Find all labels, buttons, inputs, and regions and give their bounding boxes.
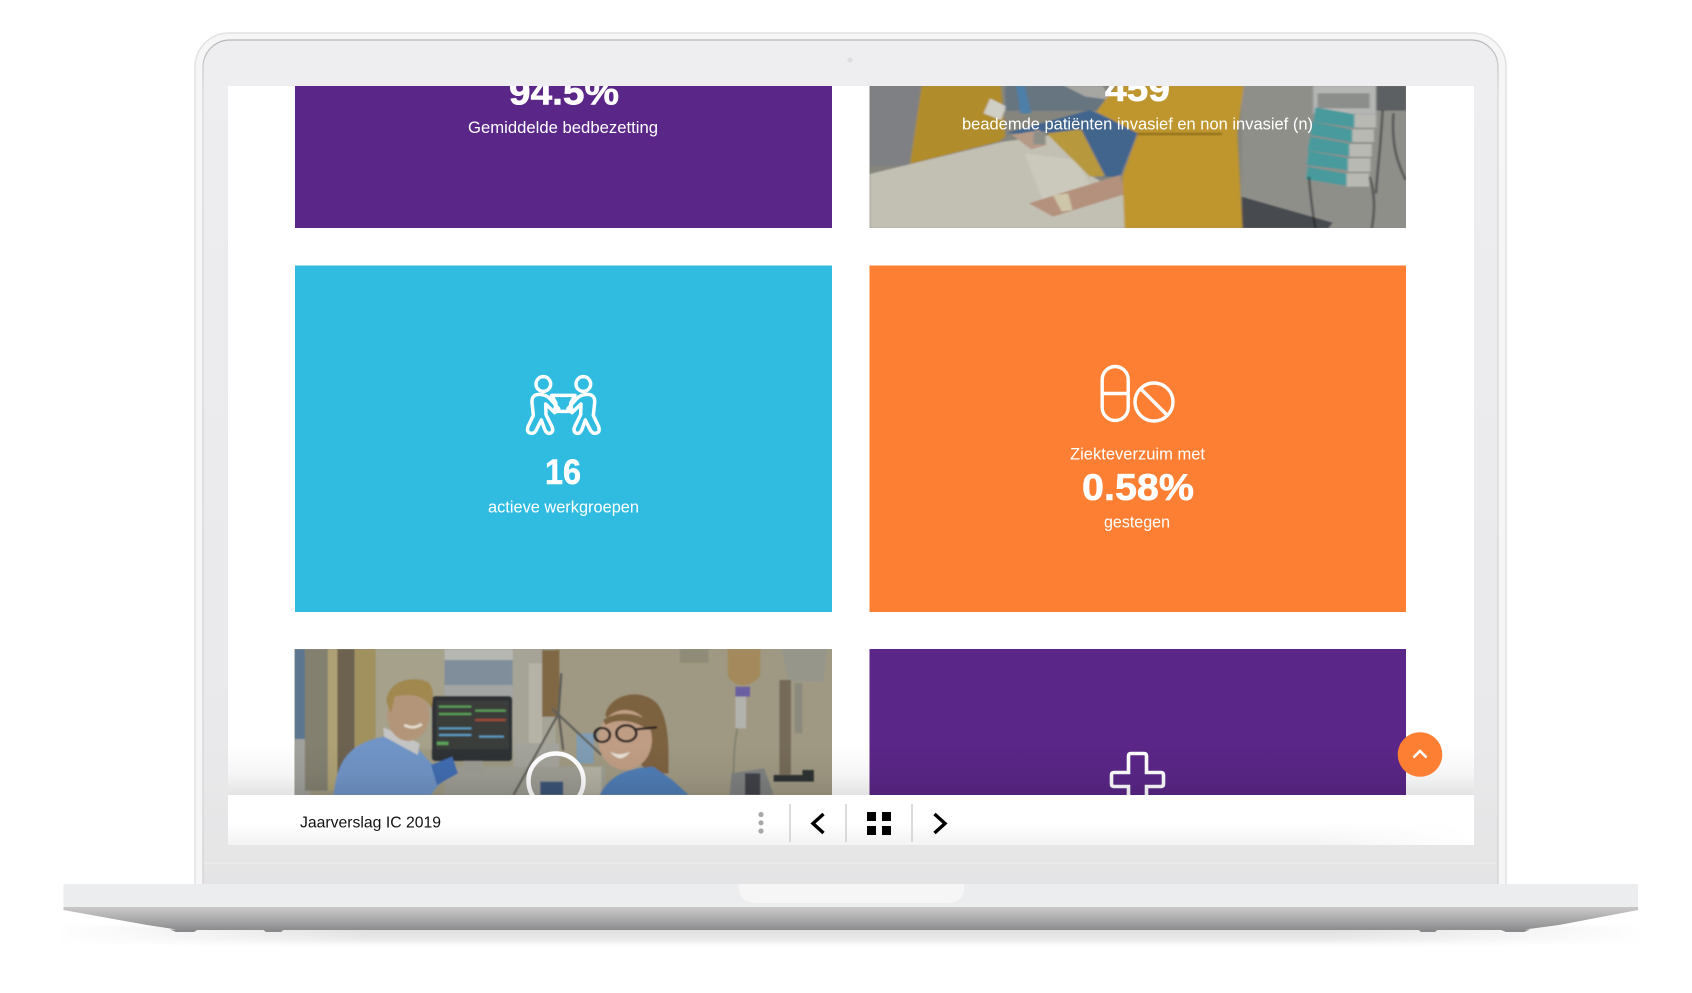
- label: Jaarverslag IC 2019: Jaarverslag IC 2019: [300, 814, 441, 832]
- patient gown: [1005, 110, 1138, 177]
- panel: blue card werkgroepen: [295, 266, 832, 612]
- blanket: [870, 133, 1125, 228]
- panel: purple card with plus: [870, 649, 1406, 810]
- monitor: [463, 760, 484, 766]
- bottom scroll shadow: [228, 770, 1474, 795]
- panel: photo card video nurses: [294, 649, 832, 808]
- laptop screen: [228, 68, 1474, 845]
- pumps: [1306, 107, 1376, 187]
- label: actieve werkgroepen: actieve werkgroepen: [488, 498, 639, 516]
- icon: more dots: [758, 812, 764, 834]
- icon: grid menu: [867, 812, 891, 835]
- label: beademde patienten: beademde patiënten invasief en non invasief (n): [962, 116, 1313, 134]
- label: Ziekteverzuim met: Ziekteverzuim met: [1070, 446, 1205, 464]
- camera: [847, 57, 853, 63]
- hinge notch: [739, 884, 964, 903]
- ground shadow: [50, 924, 1650, 950]
- stat: 16: 16: [545, 453, 581, 492]
- woman: [605, 694, 669, 773]
- icon: pill and prohibition sign: [1102, 366, 1173, 421]
- icon: video play ring: [526, 751, 586, 795]
- icon: medical plus: [1110, 752, 1166, 795]
- stat: 0.58%: 0.58%: [1082, 467, 1194, 508]
- icon: chevron up: [1414, 751, 1426, 758]
- bezel bottom line: [204, 862, 1497, 864]
- label: Gemiddelde bedbezetting: Gemiddelde bedbezetting: [468, 119, 658, 137]
- icon: two people carrying a box: [527, 377, 599, 433]
- navigation bar: [228, 795, 1474, 845]
- arm: [1029, 175, 1125, 217]
- icon: previous arrow: [813, 814, 824, 833]
- man: [334, 737, 456, 795]
- front gown: [1096, 86, 1244, 228]
- base underside: [64, 907, 1638, 930]
- desk center: [445, 767, 605, 795]
- button: back to top: [1398, 732, 1442, 777]
- panel: orange card ziekteverzuim: [870, 266, 1406, 612]
- iv bags: [728, 649, 760, 685]
- stat: 459: 459: [1105, 68, 1170, 109]
- window and curtains: [294, 649, 306, 740]
- laptop lid: [195, 33, 1506, 920]
- hand: [1012, 130, 1046, 149]
- label: gestegen: gestegen: [1104, 514, 1170, 532]
- rear gown: [910, 86, 1005, 164]
- right wall: [680, 649, 709, 663]
- panel: photo card beademde patienten: [870, 86, 1406, 228]
- base top edge: [64, 884, 1638, 908]
- stat: 94.5%: 94.5%: [509, 72, 619, 112]
- rack: [1313, 86, 1376, 114]
- laptop base: [64, 884, 1638, 932]
- icon: next arrow: [934, 814, 945, 833]
- rubber feet: [170, 930, 1530, 932]
- machine right: [730, 768, 774, 795]
- panel: purple card bedbezetting: [295, 72, 832, 228]
- iv pole: [513, 673, 601, 795]
